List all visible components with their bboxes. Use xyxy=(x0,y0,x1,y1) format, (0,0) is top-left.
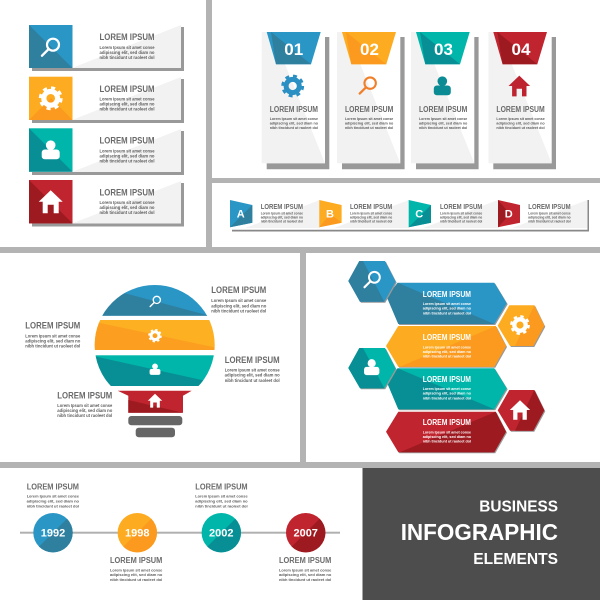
text: LOREM IPSUM xyxy=(345,105,393,114)
text: 2007 xyxy=(279,555,332,582)
text: card 3: LOREM IPSUM xyxy=(100,136,154,146)
number: 04 xyxy=(512,40,531,59)
item C: nibh tincidunt ut raoleet dol xyxy=(440,220,482,224)
text: 1998: Lorem Ipsum sit amet conse xyxy=(110,567,163,572)
text: mid right: nibh tincidunt ut raoleet dol xyxy=(225,378,280,383)
band: orange: Lorem Ipsum sit amet conse xyxy=(423,345,471,349)
text xyxy=(419,105,468,130)
icon: user xyxy=(434,76,451,95)
panel: numbered vertical cards xyxy=(262,32,556,169)
text: 2002: nibh tincidunt ut raoleet dol xyxy=(195,504,248,509)
text: Lorem Ipsum sit amet conse xyxy=(496,117,545,121)
text xyxy=(270,105,319,130)
text: LOREM IPSUM xyxy=(270,105,318,114)
text: card 4: adipiscing elit, sed diam no xyxy=(100,205,155,210)
text: LOREM IPSUM xyxy=(419,105,467,114)
band: red: Lorem Ipsum sit amet conse xyxy=(423,430,471,434)
text: 1992: adipiscing elit, sed diam no xyxy=(27,499,80,504)
item A: LOREM IPSUM xyxy=(261,204,303,211)
timeline axis xyxy=(20,532,340,534)
text: card 3 xyxy=(100,136,155,164)
text: card 2: Lorem Ipsum sit amet conse xyxy=(100,97,155,102)
panel: four horizontal cards xyxy=(29,25,184,226)
band: teal xyxy=(387,368,508,410)
text: 2002 xyxy=(195,482,248,509)
icon: gear xyxy=(283,76,303,96)
band: red: adipiscing elit, sed diam no xyxy=(423,435,472,439)
text: card 3: adipiscing elit, sed diam no xyxy=(100,154,155,158)
text: mid right: Lorem Ipsum sit amet conse xyxy=(225,368,280,373)
text: Lorem Ipsum sit amet conse xyxy=(270,117,318,121)
card: 03 xyxy=(411,32,479,169)
text: 1998: nibh tincidunt ut raoleet dol xyxy=(110,577,162,582)
text: card 4: Lorem Ipsum sit amet conse xyxy=(100,200,155,205)
card: 04 xyxy=(488,32,556,169)
text: adipiscing elit, sed diam no xyxy=(270,121,319,125)
text: 2007: LOREM IPSUM xyxy=(279,555,331,565)
text: adipiscing elit, sed diam no xyxy=(419,121,468,125)
strip background xyxy=(232,200,589,232)
band: blue: LOREM IPSUM xyxy=(423,290,471,299)
text: 2002: adipiscing elit, sed diam no xyxy=(195,499,248,504)
text: card 1: adipiscing elit, sed diam no xyxy=(100,50,155,55)
icon: user xyxy=(42,140,60,159)
icon: magnifier xyxy=(150,296,160,306)
card: teal user xyxy=(29,128,184,175)
text: 1992: LOREM IPSUM xyxy=(27,482,79,492)
text: top right: nibh tincidunt ut raoleet dol xyxy=(211,309,266,314)
text: top right xyxy=(211,285,267,314)
text: top right: adipiscing elit, sed diam no xyxy=(211,303,267,308)
text: mid left: nibh tincidunt ut raoleet dol xyxy=(25,344,80,349)
text: nibh tincidunt ut raoleet dol xyxy=(345,126,393,130)
band: orange: nibh tincidunt ut raoleet dol xyxy=(423,354,471,358)
text: bottom left: Lorem Ipsum sit amet conse xyxy=(57,403,113,408)
bulb: base bars xyxy=(128,416,182,437)
text: nibh tincidunt ut raoleet dol xyxy=(270,126,318,130)
bulb: red neck xyxy=(118,391,192,413)
text: 1998: LOREM IPSUM xyxy=(110,555,162,565)
text: LOREM IPSUM xyxy=(496,105,545,114)
milestone: 2002: 2002 xyxy=(209,528,234,540)
text: 2002: Lorem Ipsum sit amet conse xyxy=(195,494,248,499)
text: card 4 xyxy=(100,187,155,215)
item C: C xyxy=(415,208,423,220)
item C: adipiscing elit, sed diam no xyxy=(440,216,482,220)
item D: D xyxy=(505,208,513,220)
text: 1998: adipiscing elit, sed diam no xyxy=(110,572,163,577)
text: nibh tincidunt ut raoleet dol xyxy=(419,126,467,130)
item D: LOREM IPSUM xyxy=(528,204,571,211)
item A: adipiscing elit, sed diam no xyxy=(261,216,303,220)
bulb: blue band xyxy=(102,285,208,316)
text: 1998 xyxy=(110,555,163,582)
title: BUSINESS xyxy=(479,499,558,516)
bulb: teal band xyxy=(90,355,220,386)
item B: adipiscing elit, sed diam no xyxy=(350,216,392,220)
text: 1992 xyxy=(27,482,80,509)
item C: Lorem Ipsum sit amet conse xyxy=(440,212,482,216)
text: 2002: LOREM IPSUM xyxy=(195,482,248,492)
band: orange: adipiscing elit, sed diam no xyxy=(423,350,472,354)
text: card 2 xyxy=(100,84,155,112)
item A: nibh tincidunt ut raoleet dol xyxy=(261,220,303,224)
icon: house xyxy=(39,190,63,213)
text: card 2: LOREM IPSUM xyxy=(100,84,154,94)
text: mid left xyxy=(25,321,81,349)
card: red home xyxy=(29,180,184,226)
icon: gear xyxy=(149,330,161,342)
hexagon: home xyxy=(498,390,545,432)
text: card 4: nibh tincidunt ut raoleet dol xyxy=(100,210,154,215)
band: orange xyxy=(386,326,507,368)
item B: nibh tincidunt ut raoleet dol xyxy=(350,220,392,224)
text: 2007: nibh tincidunt ut raoleet dol xyxy=(279,577,331,582)
text: top right: LOREM IPSUM xyxy=(211,285,266,295)
band: orange: LOREM IPSUM xyxy=(423,333,471,342)
item B: Lorem Ipsum sit amet conse xyxy=(350,212,392,216)
item C xyxy=(409,200,482,227)
band: teal: adipiscing elit, sed diam no xyxy=(423,392,472,396)
text: adipiscing elit, sed diam no xyxy=(496,121,545,125)
text: mid left: LOREM IPSUM xyxy=(25,321,80,331)
title xyxy=(401,499,558,568)
card: 02 xyxy=(337,32,405,169)
band: red: LOREM IPSUM xyxy=(423,418,471,427)
hexagon: search xyxy=(348,261,397,303)
icon: user xyxy=(150,364,160,375)
milestone: 1998 xyxy=(118,513,157,552)
panel: hexagon stack xyxy=(348,261,545,453)
item B xyxy=(319,200,392,227)
text: top right: Lorem Ipsum sit amet conse xyxy=(211,298,267,303)
band: red: nibh tincidunt ut raoleet dol xyxy=(423,440,471,444)
item D: adipiscing elit, sed diam no xyxy=(528,216,571,220)
text: 2007: adipiscing elit, sed diam no xyxy=(279,572,332,577)
icon: house xyxy=(508,76,530,96)
band: teal: LOREM IPSUM xyxy=(423,375,471,384)
band: blue: adipiscing elit, sed diam no xyxy=(423,307,472,311)
text: 1992: nibh tincidunt ut raoleet dol xyxy=(27,504,79,509)
text: card 2: adipiscing elit, sed diam no xyxy=(100,102,155,107)
text: adipiscing elit, sed diam no xyxy=(345,121,394,125)
text xyxy=(496,105,545,130)
bulb: orange band xyxy=(90,320,220,350)
text: nibh tincidunt ut raoleet dol xyxy=(496,126,545,130)
text: bottom left: LOREM IPSUM xyxy=(57,390,112,400)
panel: title block xyxy=(362,468,600,600)
panel: timeline xyxy=(20,482,340,582)
item B: LOREM IPSUM xyxy=(350,204,392,211)
card: blue search xyxy=(29,25,184,71)
band: teal: nibh tincidunt ut raoleet dol xyxy=(423,396,471,400)
icon: magnifier xyxy=(42,39,59,56)
text: mid right: LOREM IPSUM xyxy=(225,355,280,365)
text: card 1: Lorem Ipsum sit amet conse xyxy=(100,45,155,50)
number: 01 xyxy=(284,40,303,59)
text: mid right xyxy=(225,355,280,383)
milestone: 1992: 1992 xyxy=(41,528,65,540)
text: 2007: Lorem Ipsum sit amet conse xyxy=(279,567,332,572)
item A: Lorem Ipsum sit amet conse xyxy=(261,212,303,216)
band: blue: nibh tincidunt ut raoleet dol xyxy=(423,311,471,315)
number: 02 xyxy=(360,40,379,59)
hexagon: user xyxy=(348,348,397,389)
title: INFOGRAPHIC xyxy=(401,519,558,545)
title: ELEMENTS xyxy=(473,551,558,568)
card: orange gear xyxy=(29,77,184,123)
text: mid right: adipiscing elit, sed diam no xyxy=(225,373,280,378)
item A: A xyxy=(237,208,245,220)
text: Lorem Ipsum sit amet conse xyxy=(419,117,467,121)
band: red xyxy=(386,412,507,453)
text: bottom left: adipiscing elit, sed diam no xyxy=(57,408,113,413)
band: blue xyxy=(387,283,508,325)
text: card 4: LOREM IPSUM xyxy=(100,187,154,197)
text: mid left: Lorem Ipsum sit amet conse xyxy=(25,334,81,338)
text: card 1: nibh tincidunt ut raoleet dol xyxy=(100,55,154,60)
text: bottom left xyxy=(57,390,113,418)
text: card 2: nibh tincidunt ut raoleet dol xyxy=(100,107,154,112)
item D: nibh tincidunt ut raoleet dol xyxy=(528,220,571,224)
item B: B xyxy=(326,208,334,220)
number: 03 xyxy=(434,40,453,59)
item D xyxy=(498,200,571,227)
band: teal: Lorem Ipsum sit amet conse xyxy=(423,387,471,391)
text xyxy=(345,105,394,130)
text: bottom left: nibh tincidunt ut raoleet dol xyxy=(57,413,112,418)
text: card 1 xyxy=(100,32,155,60)
text: Lorem Ipsum sit amet conse xyxy=(345,117,393,121)
band: blue: Lorem Ipsum sit amet conse xyxy=(423,302,471,306)
icon: house xyxy=(148,394,162,408)
hexagon: gear xyxy=(498,305,545,347)
text: mid left: adipiscing elit, sed diam no xyxy=(25,338,81,344)
text: card 3: nibh tincidunt ut raoleet dol xyxy=(100,158,154,164)
item A xyxy=(230,200,303,227)
text: card 3: Lorem Ipsum sit amet conse xyxy=(100,148,155,154)
text: 1992: Lorem Ipsum sit amet conse xyxy=(27,494,80,499)
milestone: 2007 xyxy=(286,513,325,552)
icon: gear xyxy=(40,88,61,109)
milestone: 1998: 1998 xyxy=(125,528,150,540)
milestone: 2002 xyxy=(202,513,241,552)
text: card 1: LOREM IPSUM xyxy=(100,32,154,42)
icon: magnifier xyxy=(360,77,376,94)
item D: Lorem Ipsum sit amet conse xyxy=(528,212,571,216)
panel: A B C D strip xyxy=(230,200,589,232)
card: 01 xyxy=(262,32,329,169)
milestone: 1992 xyxy=(33,513,73,552)
item C: LOREM IPSUM xyxy=(440,204,482,211)
milestone: 2007: 2007 xyxy=(293,528,318,540)
panel: lightbulb diagram xyxy=(25,280,280,437)
